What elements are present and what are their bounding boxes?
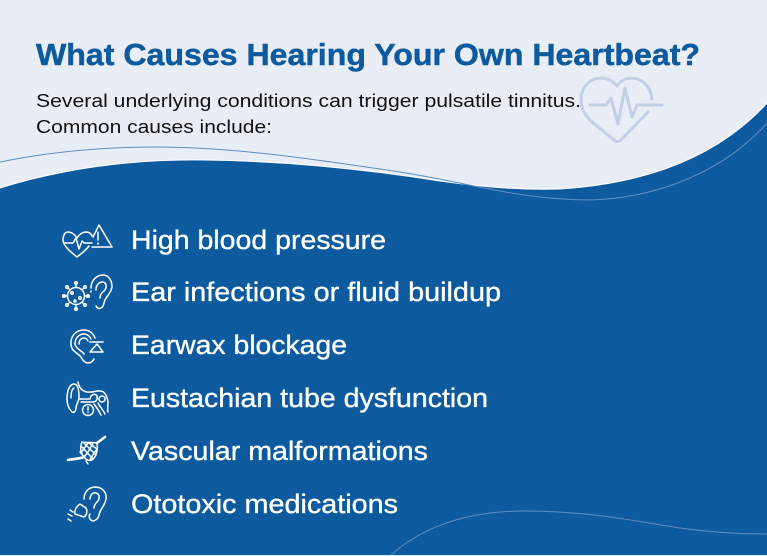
thin wave line: lower: [391, 511, 767, 555]
icon: heart and warning: [63, 225, 112, 257]
item: eustachian tube: [67, 382, 488, 416]
cause list: [63, 225, 501, 521]
label: High blood pressure: [131, 225, 386, 255]
item: vascular malformations: [68, 436, 428, 466]
label: Ear infections or fluid buildup: [131, 277, 501, 307]
title: What Causes Hearing Your Own Heartbeat?: [36, 37, 700, 72]
white edge along wave: [0, 103, 767, 189]
label: Ototoxic medications: [131, 489, 398, 519]
label: Eustachian tube dysfunction: [131, 383, 488, 413]
label: Earwax blockage: [131, 330, 347, 360]
intro text: Several underlying conditions can trigger pulsatile tinnitus.: [36, 91, 581, 111]
icon: virus and ear: [63, 275, 112, 310]
label: Vascular malformations: [131, 436, 428, 466]
thin wave line: upper: [0, 123, 767, 200]
intro text: Common causes include:: [36, 117, 272, 137]
item: ear infections: [63, 275, 501, 310]
icon: vascular network: [68, 437, 105, 464]
icon: heart with pulse: [581, 78, 662, 142]
item: earwax blockage: [71, 330, 347, 363]
icon: ear with wax: [71, 330, 103, 363]
item: ototoxic medications: [68, 487, 398, 521]
item: high blood pressure: [63, 225, 386, 257]
intro text: [36, 91, 581, 137]
icon: inner ear: [67, 382, 108, 416]
icon: ear with speaker: [68, 487, 106, 521]
